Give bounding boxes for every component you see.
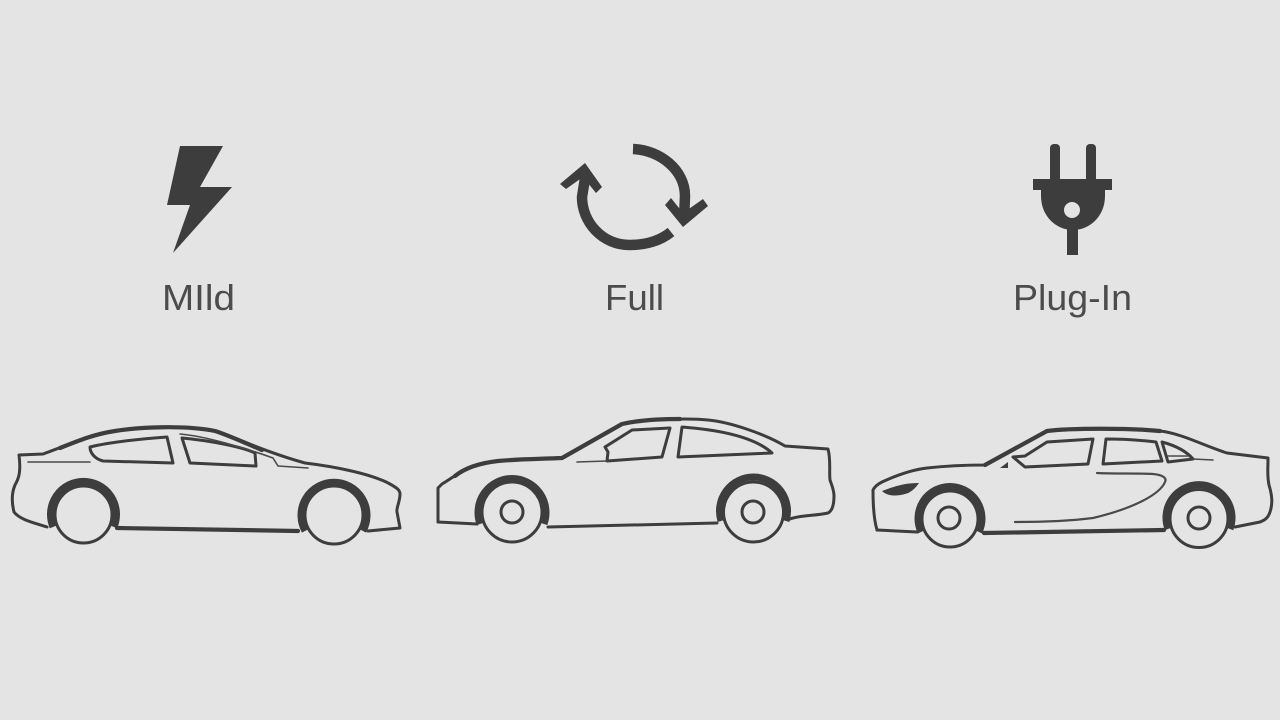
headlight	[882, 483, 919, 496]
label: full: Full	[605, 277, 664, 318]
car: plug-in hybrid sedan	[873, 429, 1272, 548]
column: mild label and icon	[162, 146, 235, 318]
icon: lightning bolt	[167, 146, 232, 253]
label: mild: MIld	[162, 277, 235, 318]
label: plug-in: Plug-In	[1013, 277, 1132, 318]
car: full hybrid coupe	[438, 419, 834, 542]
car: mild hybrid sedan	[12, 427, 400, 544]
icon: electric plug	[1033, 144, 1112, 255]
column: full label and icon	[560, 149, 708, 318]
column: plug-in label and icon	[1013, 144, 1132, 318]
icon: circular arrows	[560, 149, 708, 245]
